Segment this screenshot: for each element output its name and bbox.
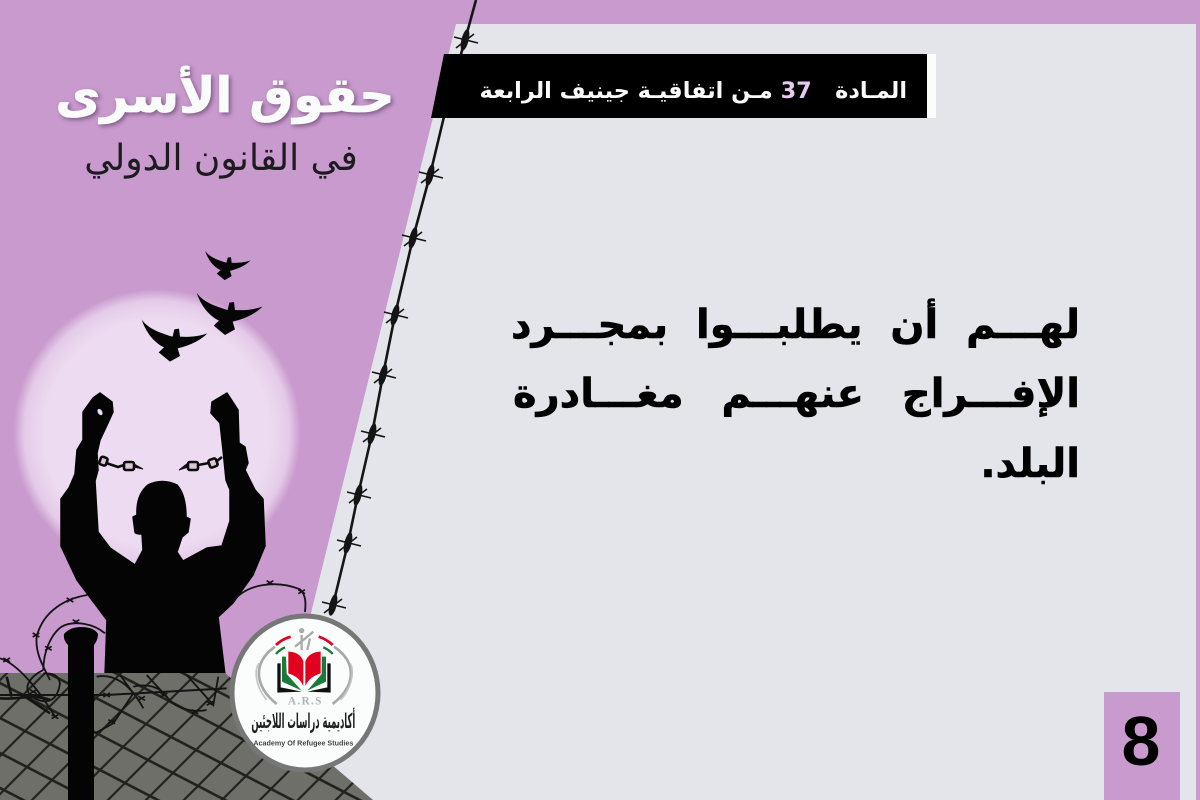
fence xyxy=(0,673,373,800)
page number box xyxy=(1104,692,1180,800)
barbed wire divider xyxy=(322,0,478,617)
logo: initials: A.R.S xyxy=(288,696,323,708)
grey content panel xyxy=(265,24,1196,800)
fence post xyxy=(64,627,98,800)
header bar xyxy=(431,54,936,118)
title: حقوق الأسرى xyxy=(55,65,395,124)
line 2: الإفـــراج عنهـــم مغـــادرة xyxy=(513,371,1080,417)
broken chain left xyxy=(99,456,143,470)
header text: المـادة 37 مـن اتفاقيـة جينيف الرابعة xyxy=(480,78,907,104)
logo: English name: Academy Of Refugee Studies xyxy=(253,740,353,747)
body text xyxy=(511,298,1080,487)
infographic canvas: أكاديمية دراسات اللاجئين xyxy=(251,707,355,733)
subtitle: في القانون الدولي xyxy=(84,138,358,179)
razor wire coils xyxy=(0,581,305,733)
logo badge xyxy=(232,616,378,770)
line 3: البلد. xyxy=(980,441,1080,487)
icon: three doves xyxy=(142,251,262,362)
line 1: لهـــم أن يطلبـــوا بمجـــرد xyxy=(511,298,1080,348)
fist highlight xyxy=(96,408,104,416)
broken chain right xyxy=(179,457,222,470)
page number: 8 xyxy=(1122,702,1160,780)
logo: laurel arcs xyxy=(256,628,352,704)
logo: book xyxy=(277,652,331,693)
prisoner silhouette xyxy=(61,393,265,675)
glow behind prisoner xyxy=(13,289,301,577)
